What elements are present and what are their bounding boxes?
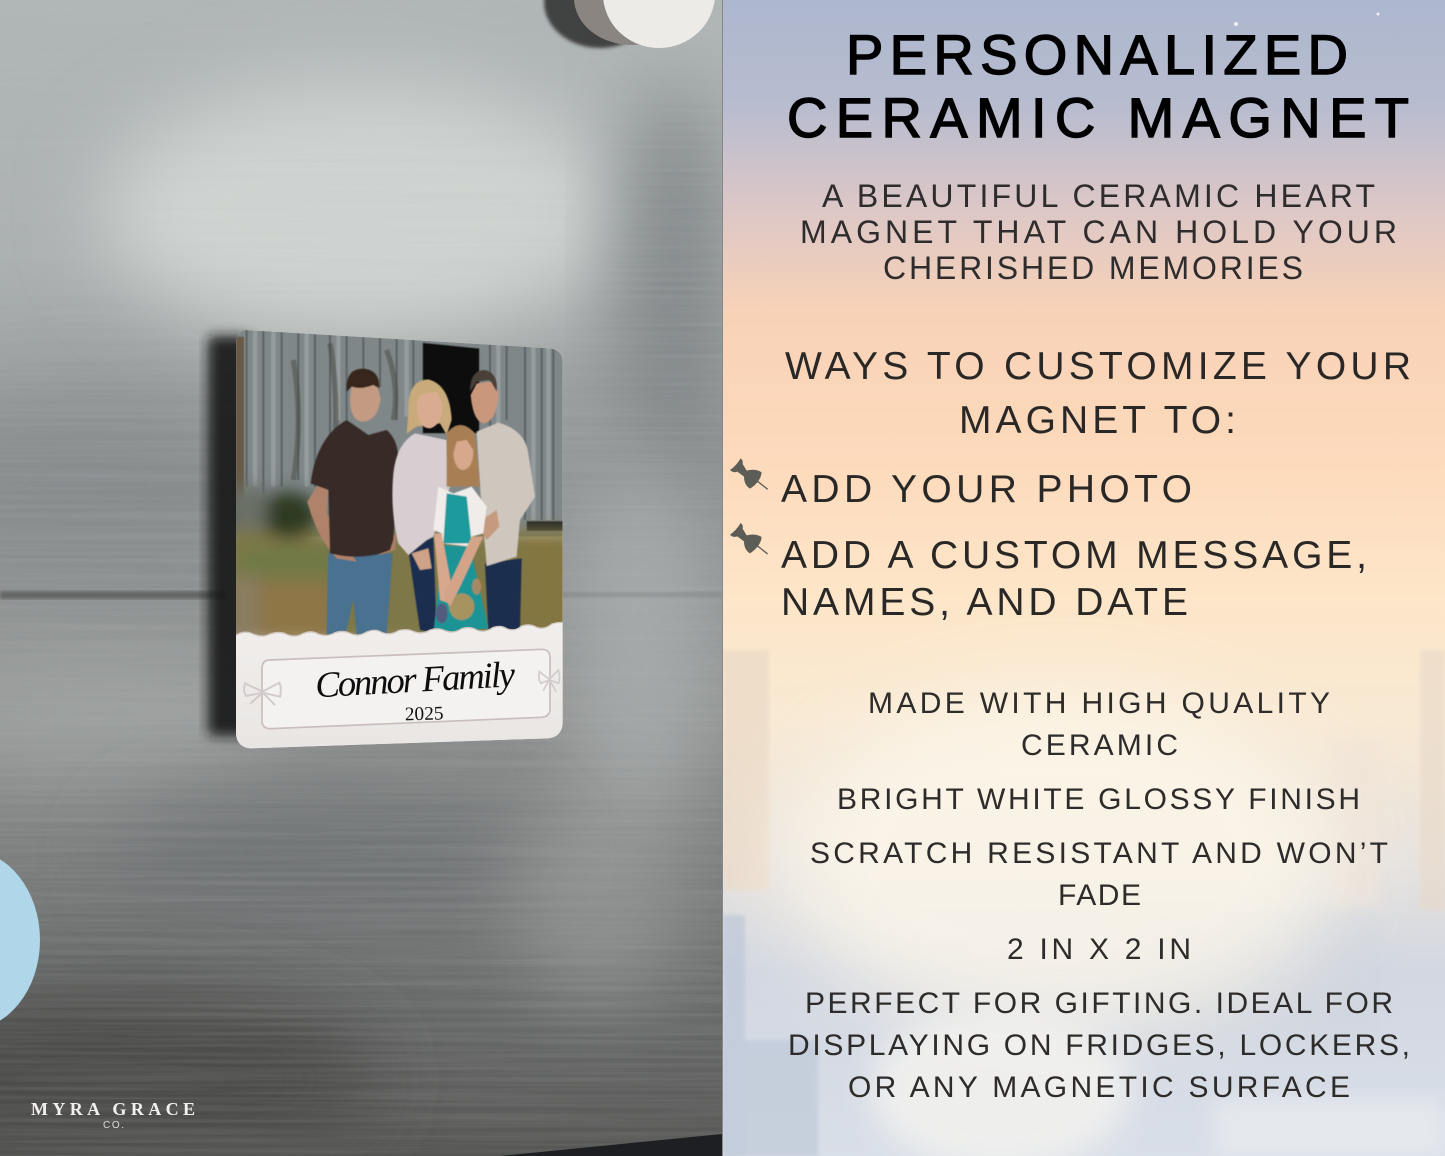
icon: right bow — [539, 670, 560, 692]
customize item: message: NAMES, AND DATE — [781, 581, 1188, 624]
feature: uses: PERFECT FOR GIFTING. IDEAL FOR — [805, 987, 1393, 1020]
heading: ways to customize — [785, 345, 1411, 442]
customize item: message: ADD A CUSTOM MESSAGE, — [781, 534, 1367, 577]
daughter — [433, 425, 488, 633]
icon: left bow — [244, 683, 281, 705]
icon: white magnet top — [544, 0, 715, 48]
customize item: message — [781, 534, 1367, 624]
card body — [236, 330, 563, 748]
feature: material — [868, 687, 1330, 762]
feature: uses: DISPLAYING ON FRIDGES, LOCKERS, — [788, 1029, 1410, 1062]
magnet card shadow — [208, 336, 252, 736]
heading: ways to customize: MAGNET TO: — [959, 399, 1236, 442]
panel: sunset watercolor background — [723, 0, 1445, 1156]
icon: blue magnet left — [0, 850, 40, 1030]
name script: Connor Family — [314, 653, 517, 705]
panel: ceramic magnet — [236, 330, 563, 748]
watermark logo: CO. — [103, 1120, 124, 1131]
feature: size: 2 IN X 2 IN — [1007, 933, 1191, 966]
father — [470, 370, 535, 632]
title: PERSONALIZED — [846, 23, 1348, 86]
title — [787, 23, 1409, 149]
watermark logo: MYRA GRACE — [31, 1099, 195, 1119]
feature: durability: SCRATCH RESISTANT AND WON’T — [810, 837, 1388, 870]
name banner — [233, 622, 567, 753]
customize item: photo: ADD YOUR PHOTO — [781, 468, 1192, 511]
subtitle: MAGNET THAT CAN HOLD YOUR — [800, 214, 1397, 250]
subtitle: CHERISHED MEMORIES — [883, 250, 1303, 286]
mother — [392, 379, 452, 633]
family photo — [236, 330, 563, 748]
feature: material: CERAMIC — [1021, 729, 1178, 762]
year: 2025 — [405, 703, 444, 725]
icon: pushpin one — [730, 458, 768, 489]
watermark logo — [31, 1099, 195, 1131]
teen boy — [307, 369, 398, 637]
feature: uses: OR ANY MAGNETIC SURFACE — [848, 1071, 1350, 1104]
feature: uses — [788, 987, 1410, 1104]
scalloped inner frame — [262, 649, 550, 729]
feature: durability — [810, 837, 1388, 912]
heading: ways to customize: WAYS TO CUSTOMIZE YOUR — [785, 345, 1411, 388]
icon: pushpin two — [730, 523, 768, 554]
subtitle — [800, 178, 1397, 286]
feature: material: MADE WITH HIGH QUALITY — [868, 687, 1330, 720]
title: CERAMIC MAGNET — [787, 86, 1409, 149]
panel: brushed steel fridge photo — [0, 0, 725, 1156]
subtitle: A BEAUTIFUL CERAMIC HEART — [822, 178, 1375, 214]
feature: durability: FADE — [1058, 879, 1141, 912]
feature: finish: BRIGHT WHITE GLOSSY FINISH — [837, 783, 1360, 816]
